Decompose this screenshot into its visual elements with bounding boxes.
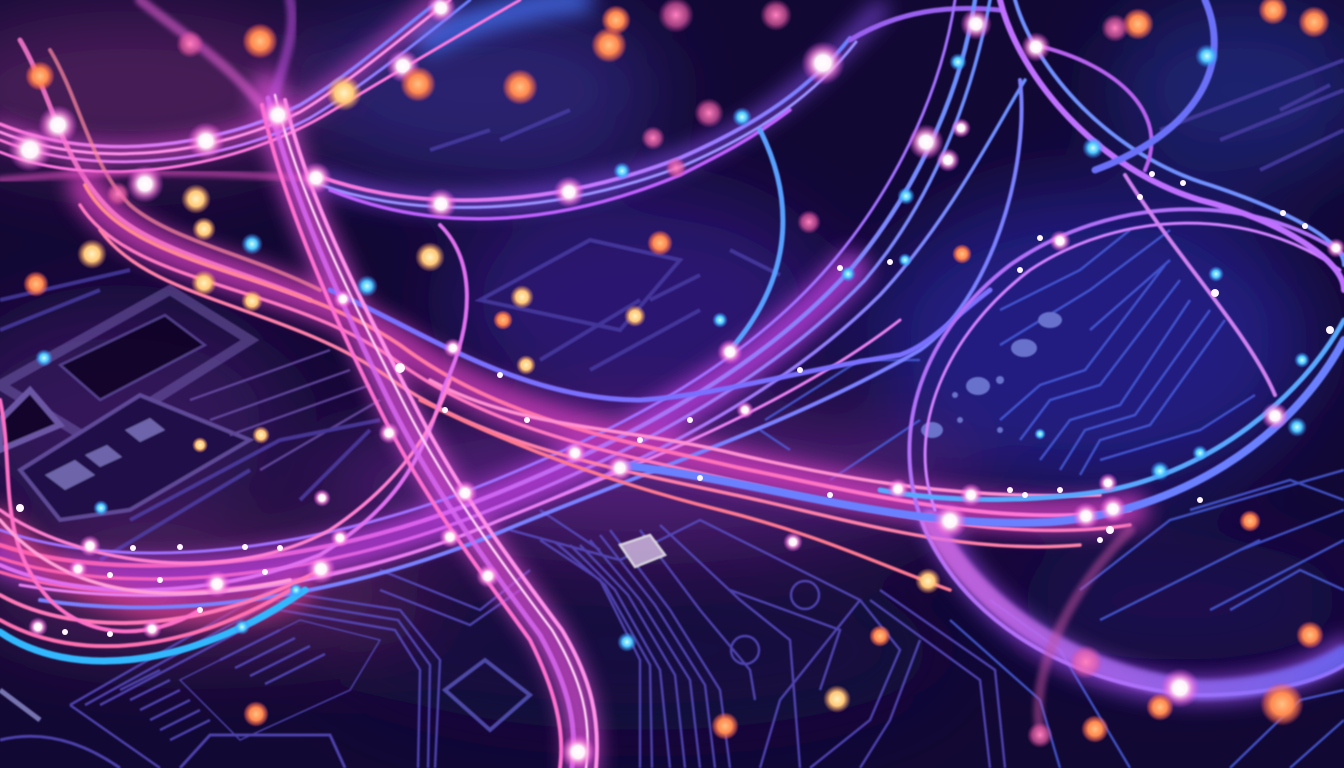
- bottom left chip and traces: [0, 590, 530, 768]
- fibre bundle: main rising strands: [0, 0, 1025, 607]
- right board inside loop: [760, 230, 1344, 768]
- upper board traces: [0, 60, 1344, 560]
- left chip panel: [0, 290, 380, 520]
- fibre bundle: right loops: [620, 0, 1344, 730]
- fibre bundle: horizontal through centre: [80, 185, 1130, 590]
- fibre bundle: top left arcs: [0, 0, 520, 300]
- centre bottom traces: [380, 510, 1005, 768]
- board dots: [921, 312, 1062, 438]
- fibre bundle: lower left waves: [0, 225, 467, 661]
- light points: small white beads along strands: [16, 171, 1334, 637]
- fibre bundle: upper blue arc: [318, 8, 1000, 350]
- light points: blue and cyan: [35, 44, 1310, 652]
- fibre bundle: pink diagonal: [262, 95, 597, 768]
